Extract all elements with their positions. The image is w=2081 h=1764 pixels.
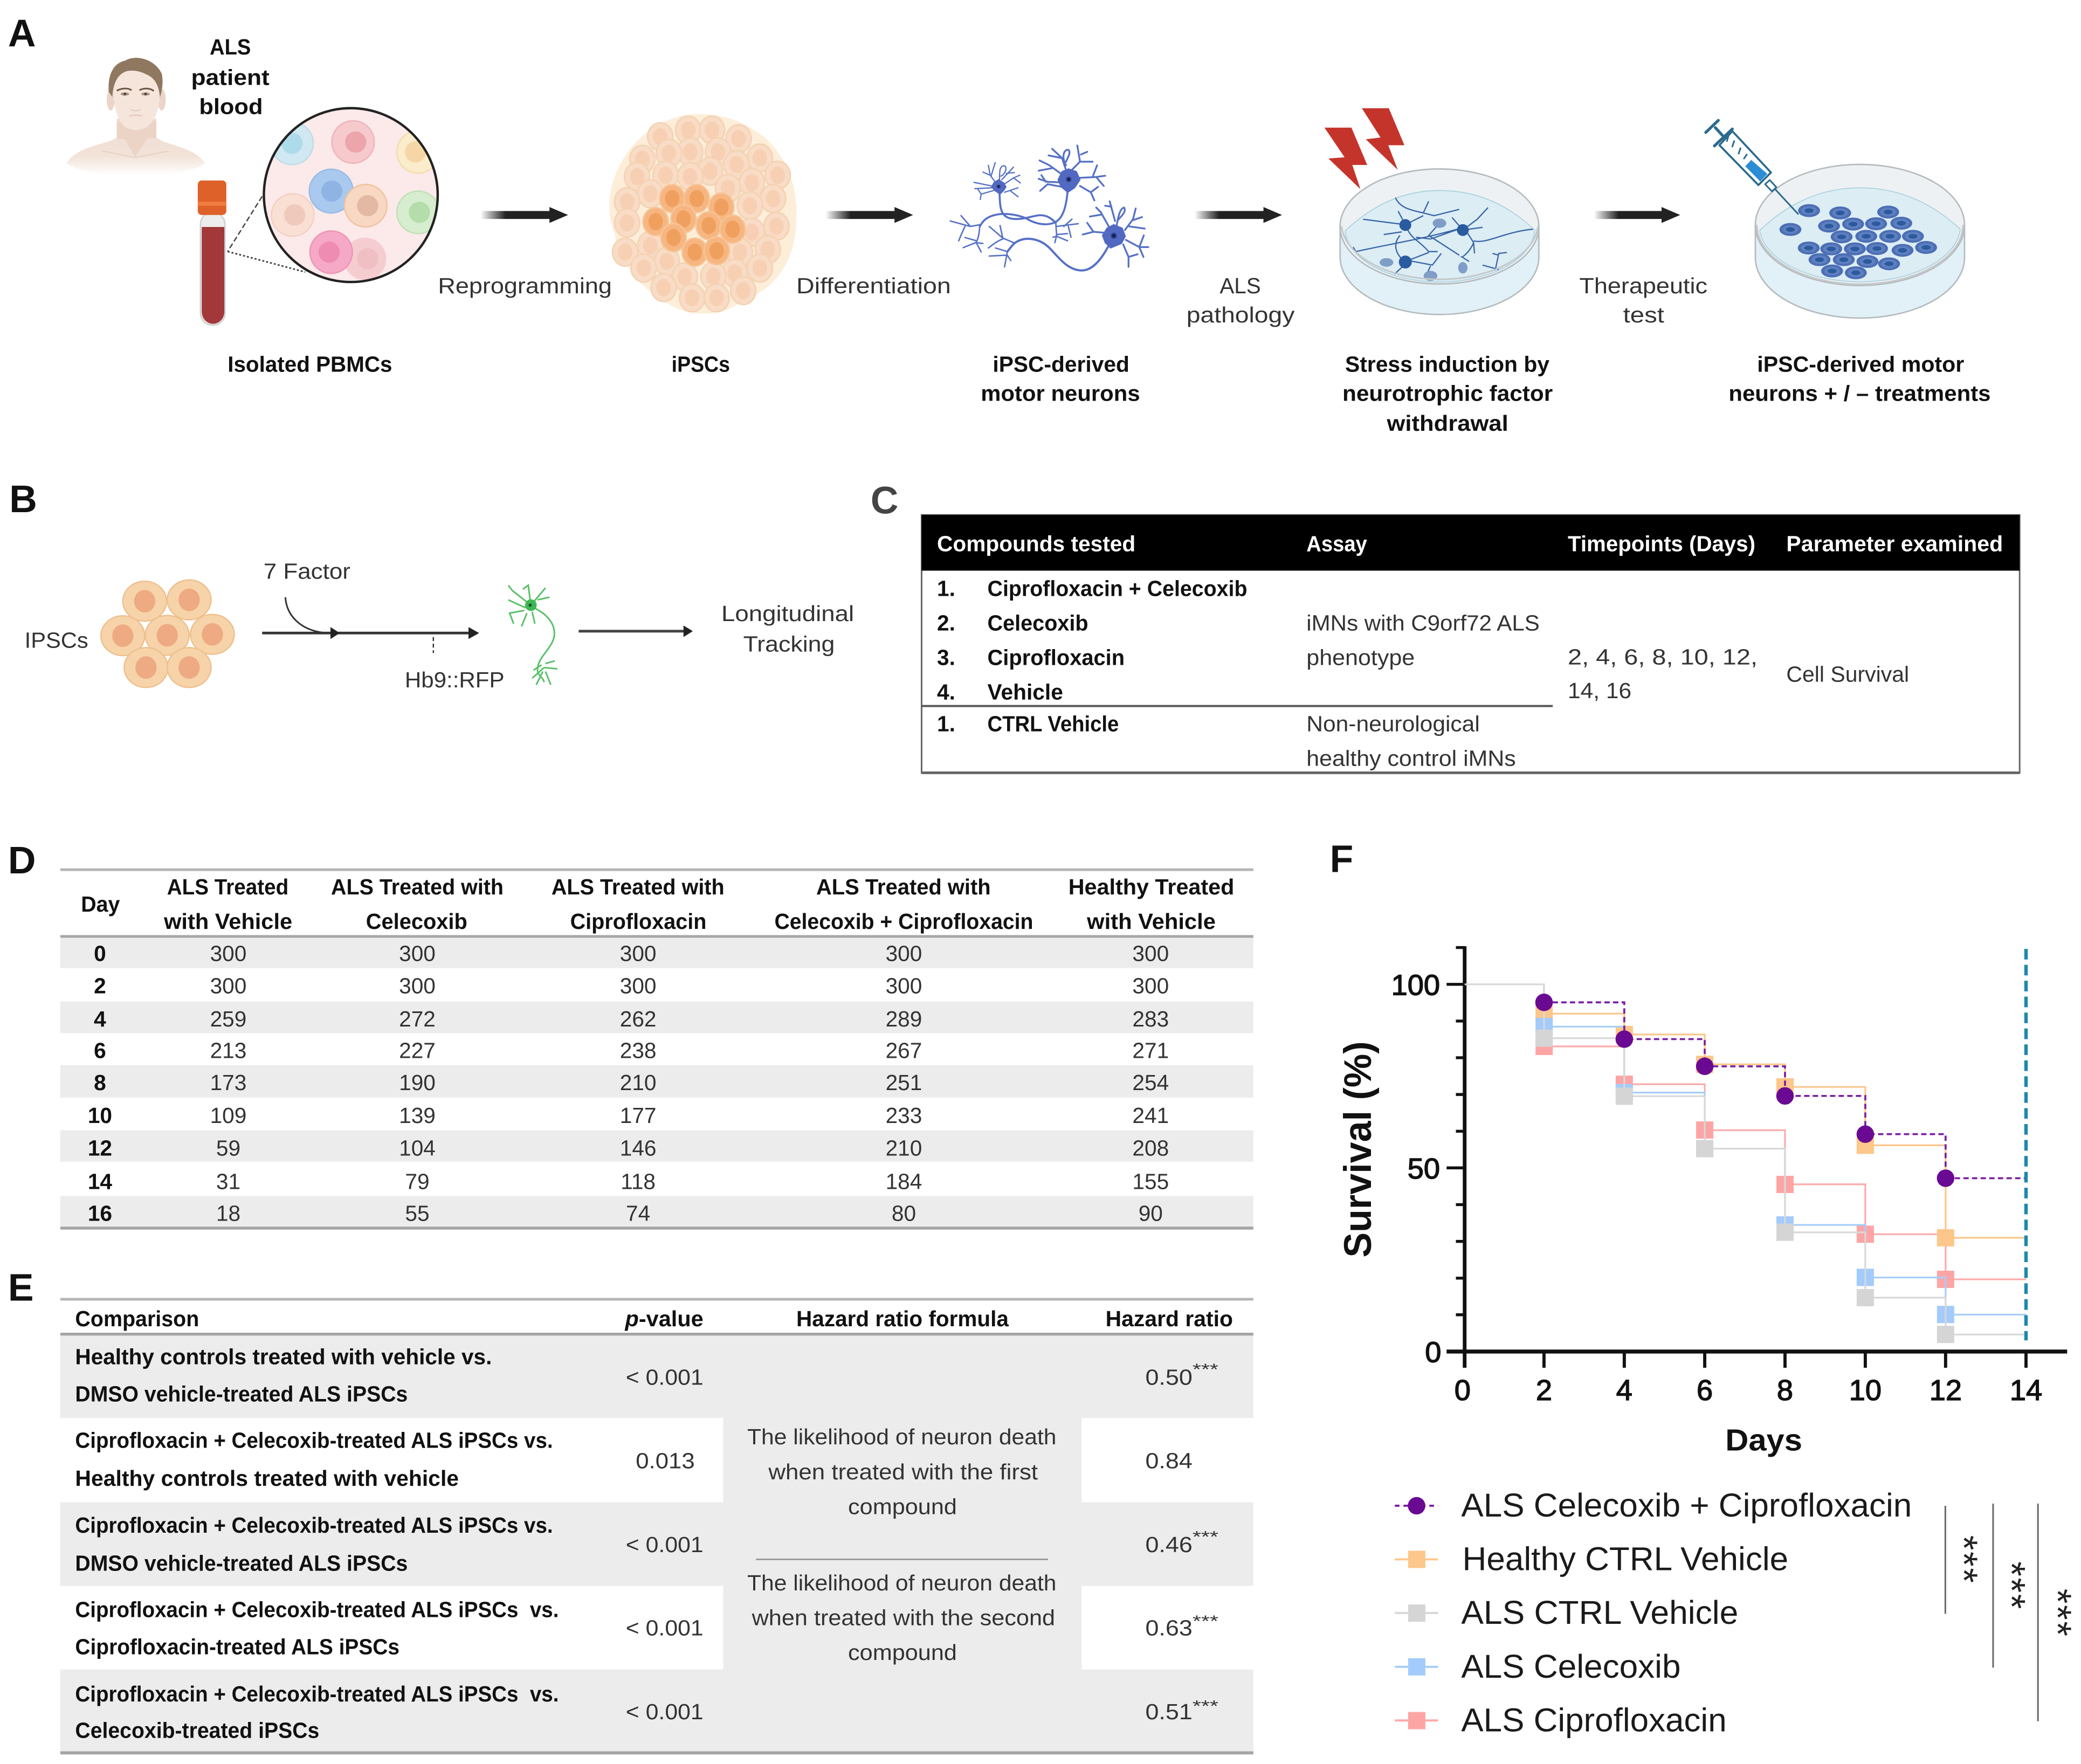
hazard ratio column: 0.84 [1145,1448,1193,1473]
compounds column: CTRL Vehicle [988,711,1119,736]
icon: green motor neuron [508,585,557,685]
hazard ratio column: 0.50 [1145,1365,1193,1390]
table rows [88,941,1169,1226]
panel D: surviving neuron counts table [8,839,1253,1228]
panel letter A: A [8,12,36,55]
axis tick labels [1391,969,2042,1407]
table rows: 251 [886,1070,922,1095]
table rows: 109 [210,1103,246,1128]
table rows: 59 [216,1135,240,1160]
hazard ratio formula column [747,1424,1057,1665]
table rows: 300 [210,941,246,966]
table rows: 118 [621,1169,656,1194]
label: ALS patient blood: ALS [210,35,251,59]
assay column [1306,610,1540,770]
hazard ratio column: *** [1193,1528,1219,1546]
hazard ratio column: 0.46 [1145,1532,1193,1557]
panel F: Kaplan-Meier survival chart [1330,837,2079,1739]
axis tick labels: 12 [1930,1374,1962,1407]
hazard ratio column [1145,1361,1219,1724]
table rows: 139 [399,1103,436,1128]
axis tick labels: 10 [1849,1374,1882,1407]
table rows: 31 [216,1169,240,1194]
timepoints column: 2, 4, 6, 8, 10, 12, [1568,644,1758,669]
table header: Celecoxib [366,909,467,934]
table header: Parameter examined [1786,532,2003,556]
endpoint dashed line at day 14 [2025,949,2027,1340]
legend item: ALS Celecoxib + Ciprofloxacin: ALS Celecoxib + Ciprofloxacin [1461,1487,1912,1524]
label: treated motor neurons: iPSC-derived motor [1757,352,1964,376]
table rows: 210 [620,1070,657,1095]
panel letter B: B [9,478,37,521]
table header: Assay [1306,532,1367,556]
table rows: 283 [1132,1007,1169,1031]
comparison column: Healthy controls treated with vehicle vs. [75,1345,492,1369]
table header: Hazard ratio formula [796,1306,1009,1331]
parameter column: Cell Survival [1786,662,1909,686]
hazard ratio formula column: when treated with the first [768,1459,1038,1484]
series: Healthy CTRL Vehicle [1535,984,2026,1246]
table rows: 300 [886,941,922,966]
compounds column: 1. [937,711,955,736]
hazard ratio column: 0.51 [1145,1699,1193,1724]
panel C: compound table [871,479,2020,773]
chart axes [1446,946,2067,1368]
compounds column: 2. [937,610,955,635]
table rows: 0 [94,941,106,966]
label: stress induction: neurotrophic factor [1342,381,1553,405]
axis tick labels: 4 [1616,1374,1632,1407]
legend item: ALS Celecoxib: ALS Celecoxib [1461,1648,1680,1685]
hazard ratio formula column: when treated with the second [752,1605,1055,1630]
compounds column: Celecoxib [988,610,1088,635]
legend item: Healthy CTRL Vehicle: Healthy CTRL Vehicle [1463,1541,1788,1578]
significance brackets: *** [1942,1535,1986,1584]
panel letter C: C [871,479,898,522]
arrow: conversion line [262,597,479,653]
axis tick labels: 2 [1536,1374,1552,1407]
table header [75,1306,1233,1331]
table header: p-value [624,1306,704,1331]
hazard ratio formula column: The likelihood of neuron death [747,1570,1057,1595]
table rows: 79 [405,1169,430,1194]
table rows: 300 [620,973,657,998]
table header: Hazard ratio [1106,1306,1233,1331]
table rows: 300 [886,973,922,998]
comparison column: Healthy controls treated with vehicle [75,1466,459,1491]
table rows: 238 [620,1038,657,1063]
table rows: 14 [88,1169,112,1194]
label: Longitudinal Tracking: Longitudinal [721,601,854,626]
panel B: direct conversion schematic [9,478,854,692]
table header: Timepoints (Days) [1568,532,1755,556]
table header [81,874,1234,934]
comparison column: Ciprofloxacin + Celecoxib-treated ALS iPSCs vs. [75,1513,553,1538]
table rows: 233 [886,1103,922,1128]
table rows: 55 [405,1201,430,1226]
axis tick labels: 0 [1425,1336,1441,1369]
label: iPSC-derived motor neurons [981,352,1140,405]
label: ALS pathology: ALS [1219,273,1261,298]
label: Reprogramming: Reprogramming [438,273,612,298]
table header: Day [81,892,120,917]
label: iPSC-derived motor neurons: motor neurons [981,381,1140,405]
table rows: 300 [1132,941,1169,966]
table header: ALS Treated [167,874,288,899]
label: Isolated PBMCs: Isolated PBMCs [228,352,392,376]
table header: ALS Treated with [552,874,725,899]
p-value column [626,1365,704,1724]
table rows: 2 [94,973,106,998]
p-value column: 0.013 [636,1448,695,1473]
table rows: 300 [210,973,246,998]
label: treated motor neurons [1728,352,1991,405]
label: iPSCs: iPSCs [672,352,730,376]
table rows: 104 [399,1135,436,1160]
panel letter F: F [1330,837,1353,880]
arrow: to tracking [578,625,693,637]
comparison column: Ciprofloxacin-treated ALS iPSCs [75,1634,399,1659]
table header [921,515,2020,571]
arrow: reprogramming [480,207,568,223]
label: Therapeutic test: Therapeutic [1579,273,1707,298]
table rows: 184 [886,1169,922,1194]
hazard ratio formula column: compound [848,1640,957,1665]
x axis title: Days [1725,1423,1802,1457]
assay column: healthy control iMNs [1306,746,1516,770]
comparison column: Celecoxib-treated iPSCs [75,1718,319,1742]
table frame [921,515,2020,773]
table rows: 16 [88,1201,112,1226]
label: Therapeutic test [1579,273,1707,327]
hazard ratio column: *** [1193,1361,1219,1379]
axis tick labels: 14 [2010,1374,2042,1407]
panel letter D: D [8,839,36,882]
table rows: 173 [210,1070,246,1095]
panel A: ALS iPSC workflow [8,12,1991,436]
icon: magnified PBMC cells [264,108,439,282]
arrow: ALS pathology [1195,207,1282,223]
table rows: 271 [1132,1038,1169,1063]
table rows: 146 [620,1135,657,1160]
table rows: 177 [620,1103,657,1128]
significance brackets: *** [1990,1561,2033,1610]
comparison column: Ciprofloxacin + Celecoxib-treated ALS iPSCs vs. [75,1597,559,1622]
timepoints column [1568,644,1758,703]
legend item: ALS CTRL Vehicle: ALS CTRL Vehicle [1461,1594,1738,1631]
row shading and rules [60,1299,1253,1753]
label: treated motor neurons: neurons + / – treatments [1728,381,1991,405]
table rows: 18 [216,1201,240,1226]
comparison column: DMSO vehicle-treated ALS iPSCs [75,1381,408,1406]
label: ALS patient blood: blood [199,94,263,119]
table header: with Vehicle [163,909,292,934]
label: Therapeutic test: test [1623,302,1664,327]
table header: ALS Treated with [331,874,504,899]
table rows: 190 [399,1070,436,1095]
assay column: Non-neurological [1306,711,1480,736]
comparison column: Ciprofloxacin + Celecoxib-treated ALS iPSCs vs. [75,1682,559,1706]
label: ALS patient blood: patient [191,65,270,90]
assay column: phenotype [1306,645,1415,670]
table rows: 208 [1132,1135,1169,1160]
dashed zoom lines [228,196,305,272]
icon: blood tube [198,181,226,325]
table header: Celecoxib + Ciprofloxacin [774,909,1033,934]
table rows: 12 [88,1135,112,1160]
compounds column: 3. [937,645,955,670]
axis tick labels: 100 [1391,969,1440,1001]
label: Longitudinal Tracking [721,601,854,657]
comparison column: Ciprofloxacin + Celecoxib-treated ALS iPSCs vs. [75,1428,553,1453]
table rows: 74 [626,1201,650,1226]
label: Hb9::RFP: Hb9::RFP [405,667,505,692]
label: Longitudinal Tracking: Tracking [743,632,835,657]
chart legend [1395,1487,1912,1739]
axis tick labels: 50 [1408,1153,1440,1185]
table rows: 262 [620,1007,657,1031]
label: stress induction: withdrawal [1386,411,1508,436]
compounds column [937,576,1248,736]
comparison column [75,1345,559,1742]
label: IPSCs: IPSCs [25,628,88,652]
table rows: 213 [210,1038,246,1063]
icon: iPSC colony [609,114,797,314]
label: ALS pathology: pathology [1187,302,1295,327]
table header: ALS Treated with [816,874,991,899]
table rows: 6 [94,1038,106,1063]
assay column: iMNs with C9orf72 ALS [1306,610,1540,635]
hazard ratio formula column: compound [848,1494,957,1519]
table rows: 10 [88,1103,112,1128]
timepoints column: 14, 16 [1568,678,1631,703]
panel E: hazard ratio table [8,1266,1253,1753]
series: ALS Celecoxib + Ciprofloxacin [1535,994,2026,1187]
table header: Ciprofloxacin [570,909,706,934]
arrow: differentiation [825,207,913,223]
table header: with Vehicle [1086,909,1216,934]
table rows: 267 [886,1038,922,1063]
table rows: 289 [886,1007,922,1031]
table rows: 272 [399,1007,436,1031]
arrow: therapeutic test [1594,207,1680,223]
label: stress induction: Stress induction by [1345,352,1549,376]
row shading and rules [60,870,1253,1228]
compounds column: Vehicle [988,679,1063,704]
compounds column: 1. [937,576,955,601]
compounds column: Ciprofloxacin + Celecoxib [988,576,1248,601]
table header: Comparison [75,1306,199,1331]
table rows: 259 [210,1007,246,1031]
label: 7 Factor: 7 Factor [264,559,350,583]
hazard ratio column: *** [1193,1613,1219,1630]
icon: stressed petri dish with lightning bolts [1325,108,1539,314]
hazard ratio column: 0.63 [1145,1616,1193,1641]
legend item: ALS Ciprofloxacin: ALS Ciprofloxacin [1461,1701,1727,1739]
icon: patient bust [66,58,205,176]
significance brackets [1942,1504,2079,1721]
table rows: 155 [1132,1169,1169,1194]
series: ALS CTRL Vehicle [1465,984,2026,1343]
panel letter E: E [8,1266,33,1309]
table rows: 300 [620,941,657,966]
series: ALS Celecoxib [1535,984,2026,1323]
table rows: 80 [892,1201,916,1226]
compounds column: Ciprofloxacin [988,645,1125,670]
significance brackets: *** [2036,1589,2079,1637]
label: stress induction [1342,352,1553,436]
table rows: 300 [1132,973,1169,998]
p-value column: < 0.001 [626,1365,704,1390]
comparison column: DMSO vehicle-treated ALS iPSCs [75,1551,408,1575]
table header: Compounds tested [937,532,1135,556]
label: ALS patient blood [191,35,270,119]
table rows: 8 [94,1070,106,1095]
table rows: 227 [399,1038,436,1063]
icon: treated petri dish with syringe [1706,120,1965,318]
table rows: 90 [1139,1201,1163,1226]
table rows: 210 [886,1135,922,1160]
hazard ratio formula column: The likelihood of neuron death [747,1424,1057,1449]
label: iPSC-derived motor neurons: iPSC-derived [993,352,1129,376]
p-value column: < 0.001 [626,1699,704,1724]
hazard ratio column: *** [1193,1697,1219,1715]
label: Differentiation: Differentiation [796,273,951,298]
table rows: 300 [399,973,436,998]
p-value column: < 0.001 [626,1532,704,1557]
table rows: 4 [94,1007,106,1031]
series: ALS Ciprofloxacin [1535,984,2026,1288]
label: ALS pathology [1187,273,1295,327]
icon: motor neurons [950,146,1148,271]
table rows: 254 [1132,1070,1169,1095]
table rows: 241 [1132,1103,1169,1128]
axis tick labels: 6 [1697,1374,1713,1407]
p-value column: < 0.001 [626,1616,704,1641]
axis tick labels: 0 [1455,1374,1471,1407]
axis tick labels: 8 [1777,1374,1793,1407]
y axis title: Survival (%) [1336,1041,1380,1258]
icon: iPSC cluster [101,580,235,687]
compounds column: 4. [937,679,955,704]
table header: Healthy Treated [1069,874,1234,899]
table rows: 300 [399,941,436,966]
